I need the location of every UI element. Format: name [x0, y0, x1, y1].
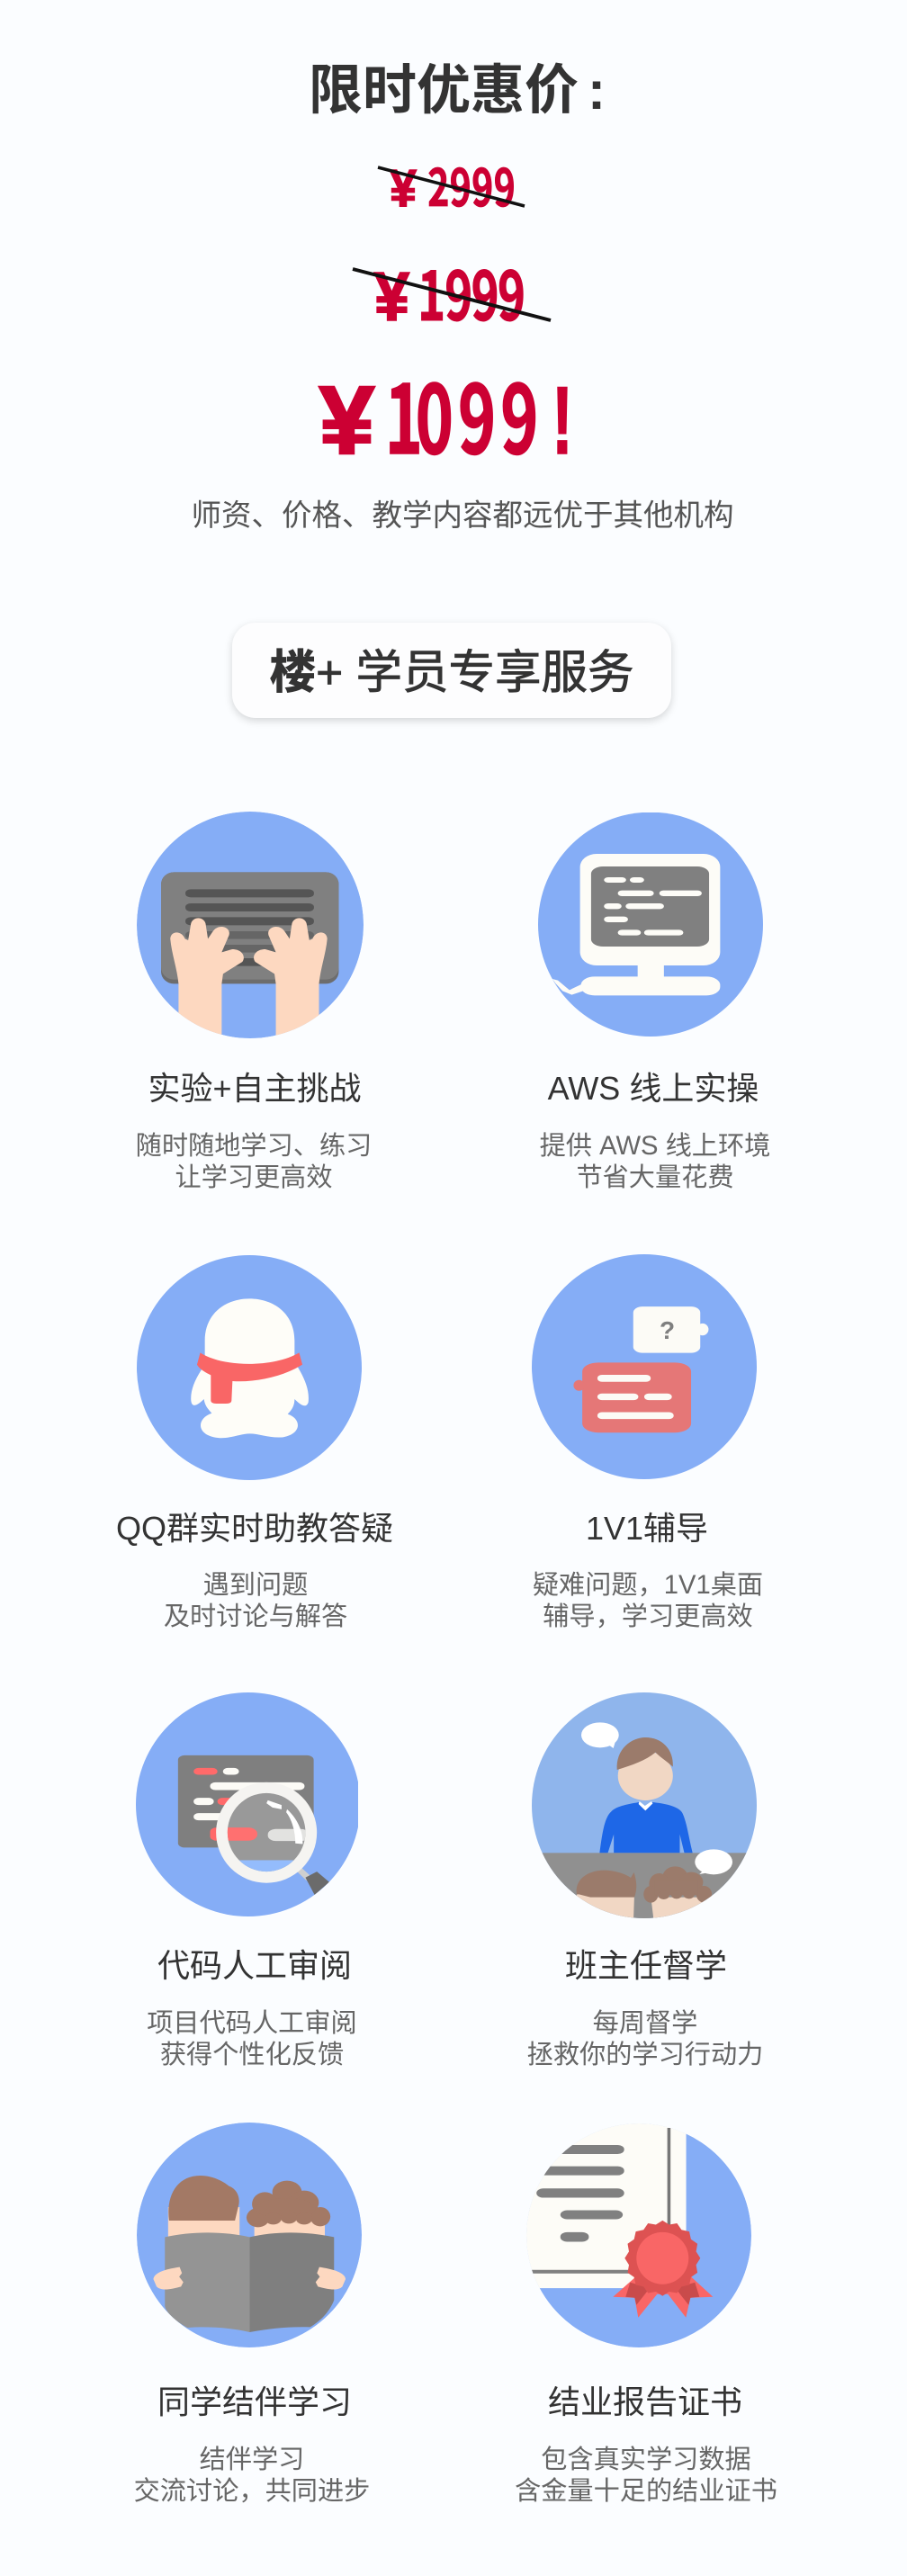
icon: teacher and students	[532, 1692, 757, 1918]
button: student services: 楼+ 学员专享服务	[270, 646, 633, 698]
title: labs: 实验+自主挑战	[148, 1070, 362, 1107]
description: AWS: 提供 AWS 线上环境	[540, 1132, 770, 1161]
icon: two students reading	[137, 2123, 362, 2347]
description: 1v1: 疑难问题，1V1桌面	[533, 1571, 763, 1600]
description: labs: 随时随地学习、练习	[136, 1132, 372, 1161]
description: labs	[136, 1132, 372, 1192]
description: certificate: 含金量十足的结业证书	[515, 2477, 777, 2506]
title: 1v1: 1V1辅导	[586, 1510, 708, 1547]
subheading: 师资、价格、教学内容都远优于其他机构	[191, 499, 734, 533]
icon: computer	[538, 812, 763, 1037]
icon: code magnifier	[136, 1692, 358, 1916]
description: 1v1	[533, 1571, 763, 1631]
description: study partners: 结伴学习	[200, 2446, 304, 2474]
button: student services	[232, 623, 671, 718]
description: AWS: 节省大量花费	[576, 1163, 734, 1192]
icon: QQ penguin	[137, 1255, 362, 1480]
description: QQ group	[164, 1571, 347, 1631]
description: labs: 让学习更高效	[175, 1163, 333, 1192]
description: AWS	[540, 1132, 770, 1192]
title: certificate: 结业报告证书	[548, 2383, 742, 2420]
description: code review: 项目代码人工审阅	[147, 2009, 357, 2038]
description: certificate	[515, 2446, 777, 2506]
title: QQ group: QQ群实时助教答疑	[116, 1510, 393, 1547]
icon: certificate	[526, 2123, 751, 2347]
description: QQ group: 及时讨论与解答	[164, 1602, 347, 1631]
heading: limited-time price: 限时优惠价:	[309, 60, 606, 121]
description: supervision: 每周督学	[593, 2009, 697, 2038]
title: AWS: AWS 线上实操	[548, 1070, 759, 1107]
description: certificate: 包含真实学习数据	[541, 2446, 751, 2474]
icon: keyboard and hands	[137, 812, 364, 1038]
current price 1099	[318, 378, 573, 459]
description: QQ group: 遇到问题	[203, 1571, 308, 1600]
title: study partners: 同学结伴学习	[157, 2383, 352, 2420]
description: 1v1: 辅导，学习更高效	[543, 1602, 753, 1631]
title: supervision: 班主任督学	[565, 1947, 727, 1984]
description: study partners: 交流讨论，共同进步	[134, 2477, 370, 2506]
description: study partners	[134, 2446, 370, 2506]
description: supervision	[527, 2009, 763, 2069]
title: code review: 代码人工审阅	[157, 1947, 352, 1984]
description: code review	[147, 2009, 357, 2069]
struck price 2999	[378, 162, 525, 212]
description: code review: 获得个性化反馈	[160, 2041, 344, 2069]
icon: chat bubbles	[532, 1254, 757, 1479]
description: supervision: 拯救你的学习行动力	[527, 2041, 763, 2069]
struck price 1999	[353, 265, 551, 326]
icon: chat bubbles: ?	[660, 1316, 675, 1344]
